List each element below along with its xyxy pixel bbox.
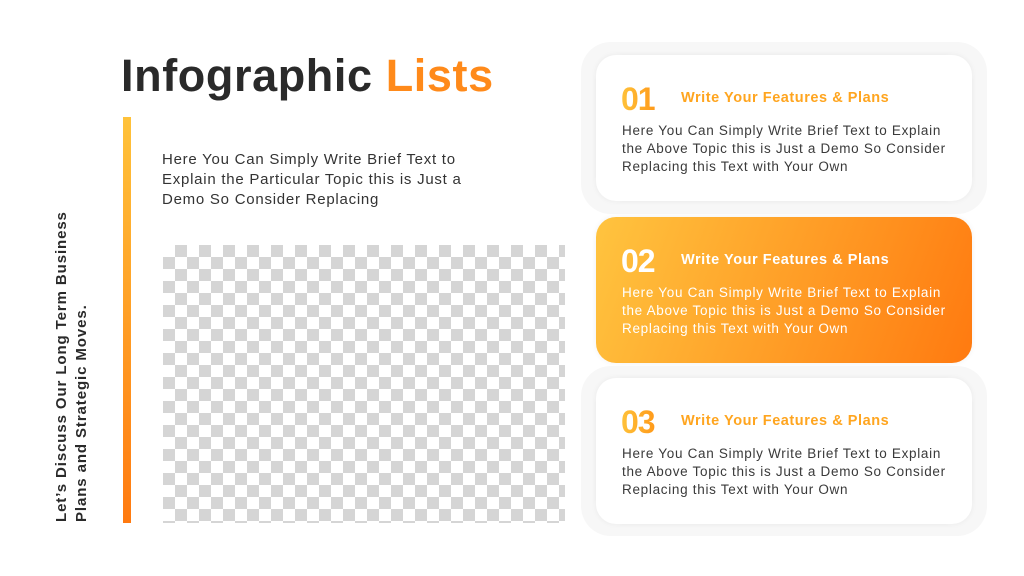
accent bar xyxy=(123,117,131,523)
image placeholder xyxy=(163,245,565,523)
card 01: Write Your Features & Plans xyxy=(681,90,889,106)
card 02: 02 xyxy=(621,243,655,279)
card 01: 01 xyxy=(621,81,655,117)
card 01 xyxy=(596,55,972,201)
card 03: 03 xyxy=(621,404,655,440)
vertical text: Let’s Discuss Our Long Term Business Plans and Strategic Moves. xyxy=(53,211,90,522)
card 03: Write Your Features & Plans xyxy=(681,413,889,429)
title: Infographic Lists xyxy=(121,50,494,101)
card 03: Here You Can Simply Write Brief Text to Explain the Above Topic this is Just a Demo So Consider Replacing this Text with Your Own xyxy=(622,446,946,497)
intro text: Here You Can Simply Write Brief Text to Explain the Particular Topic this is Just a Demo So Consider Replacing xyxy=(162,151,462,208)
card 02 xyxy=(596,217,972,363)
card 02: Here You Can Simply Write Brief Text to Explain the Above Topic this is Just a Demo So Consider Replacing this Text with Your Own xyxy=(622,285,946,336)
card 03 xyxy=(596,378,972,524)
card 01: Here You Can Simply Write Brief Text to Explain the Above Topic this is Just a Demo So Consider Replacing this Text with Your Own xyxy=(622,123,946,174)
card 02: Write Your Features & Plans xyxy=(681,252,889,268)
